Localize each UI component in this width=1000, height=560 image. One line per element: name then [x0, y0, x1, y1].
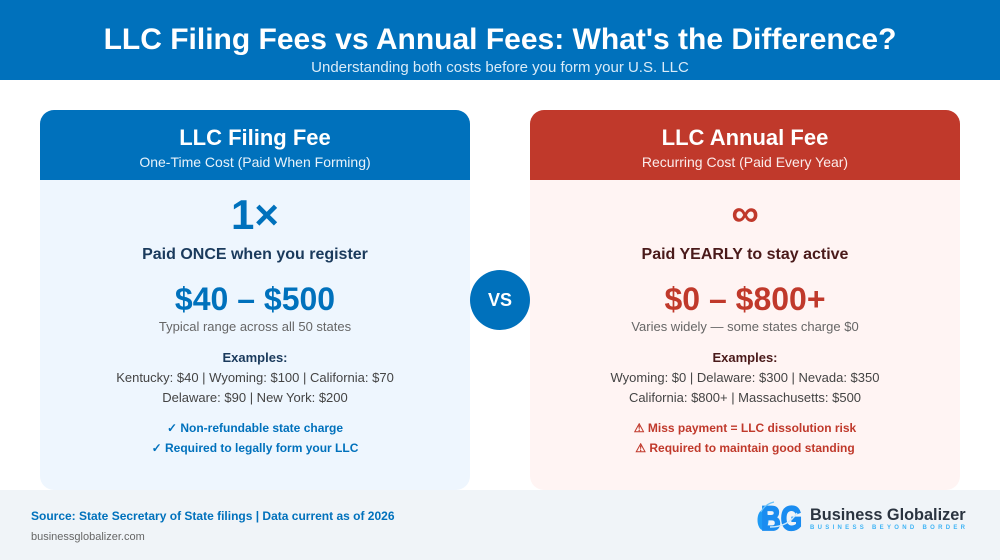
annual fee subheading: Recurring Cost (Paid Every Year) — [642, 154, 848, 170]
filing key points — [152, 421, 358, 455]
annual examples — [610, 350, 879, 405]
annual fee header — [530, 110, 960, 180]
logo: Business Globalizer — [758, 500, 968, 534]
annual examples: Examples: — [712, 350, 778, 365]
annual price range: $0 – $800+ — [664, 281, 826, 317]
annual frequency text: Paid YEARLY to stay active — [642, 246, 848, 263]
filing fee heading: LLC Filing Fee — [179, 125, 331, 150]
filing fee header — [40, 110, 470, 180]
title: LLC Filing Fees vs Annual Fees: What's the Difference? — [104, 23, 896, 56]
annual examples: Wyoming: $0 | Delaware: $300 | Nevada: $350 — [611, 370, 879, 385]
icon: one time: 1× — [231, 191, 279, 238]
filing key points: ✓ Required to legally form your LLC — [152, 441, 358, 455]
annual key points — [634, 421, 856, 455]
logo wordmark: Business Globalizer — [810, 506, 966, 524]
vs badge — [470, 270, 530, 330]
annual examples: California: $800+ | Massachusetts: $500 — [629, 390, 861, 405]
annual fee heading: LLC Annual Fee — [662, 125, 828, 150]
filing range note: Typical range across all 50 states — [159, 319, 351, 334]
annual range note: Varies widely — some states charge $0 — [631, 319, 859, 334]
source line: Source: State Secretary of State filings | Data current as of 2026 — [31, 509, 394, 523]
filing fee subheading: One-Time Cost (Paid When Forming) — [139, 154, 371, 170]
filing examples — [116, 350, 394, 405]
annual key points: ⚠ Required to maintain good standing — [635, 441, 855, 455]
filing examples: Kentucky: $40 | Wyoming: $100 | California: $70 — [116, 370, 394, 385]
website: businessglobalizer.com — [31, 531, 145, 543]
subtitle: Understanding both costs before you form your U.S. LLC — [311, 59, 689, 76]
panel: LLC filing fee — [40, 110, 470, 490]
filing examples: Delaware: $90 | New York: $200 — [162, 390, 348, 405]
filing key points: ✓ Non-refundable state charge — [167, 421, 343, 435]
icon: infinity: ∞ — [731, 193, 759, 235]
footer — [0, 490, 1000, 560]
panel: LLC annual fee — [530, 110, 960, 490]
vs badge: VS — [488, 290, 512, 310]
logo tagline: BUSINESS BEYOND BORDER — [810, 525, 968, 531]
header banner — [0, 0, 1000, 80]
annual key points: ⚠ Miss payment = LLC dissolution risk — [634, 421, 856, 435]
filing price range: $40 – $500 — [175, 281, 335, 317]
filing examples: Examples: — [222, 350, 288, 365]
filing frequency text: Paid ONCE when you register — [142, 246, 368, 263]
